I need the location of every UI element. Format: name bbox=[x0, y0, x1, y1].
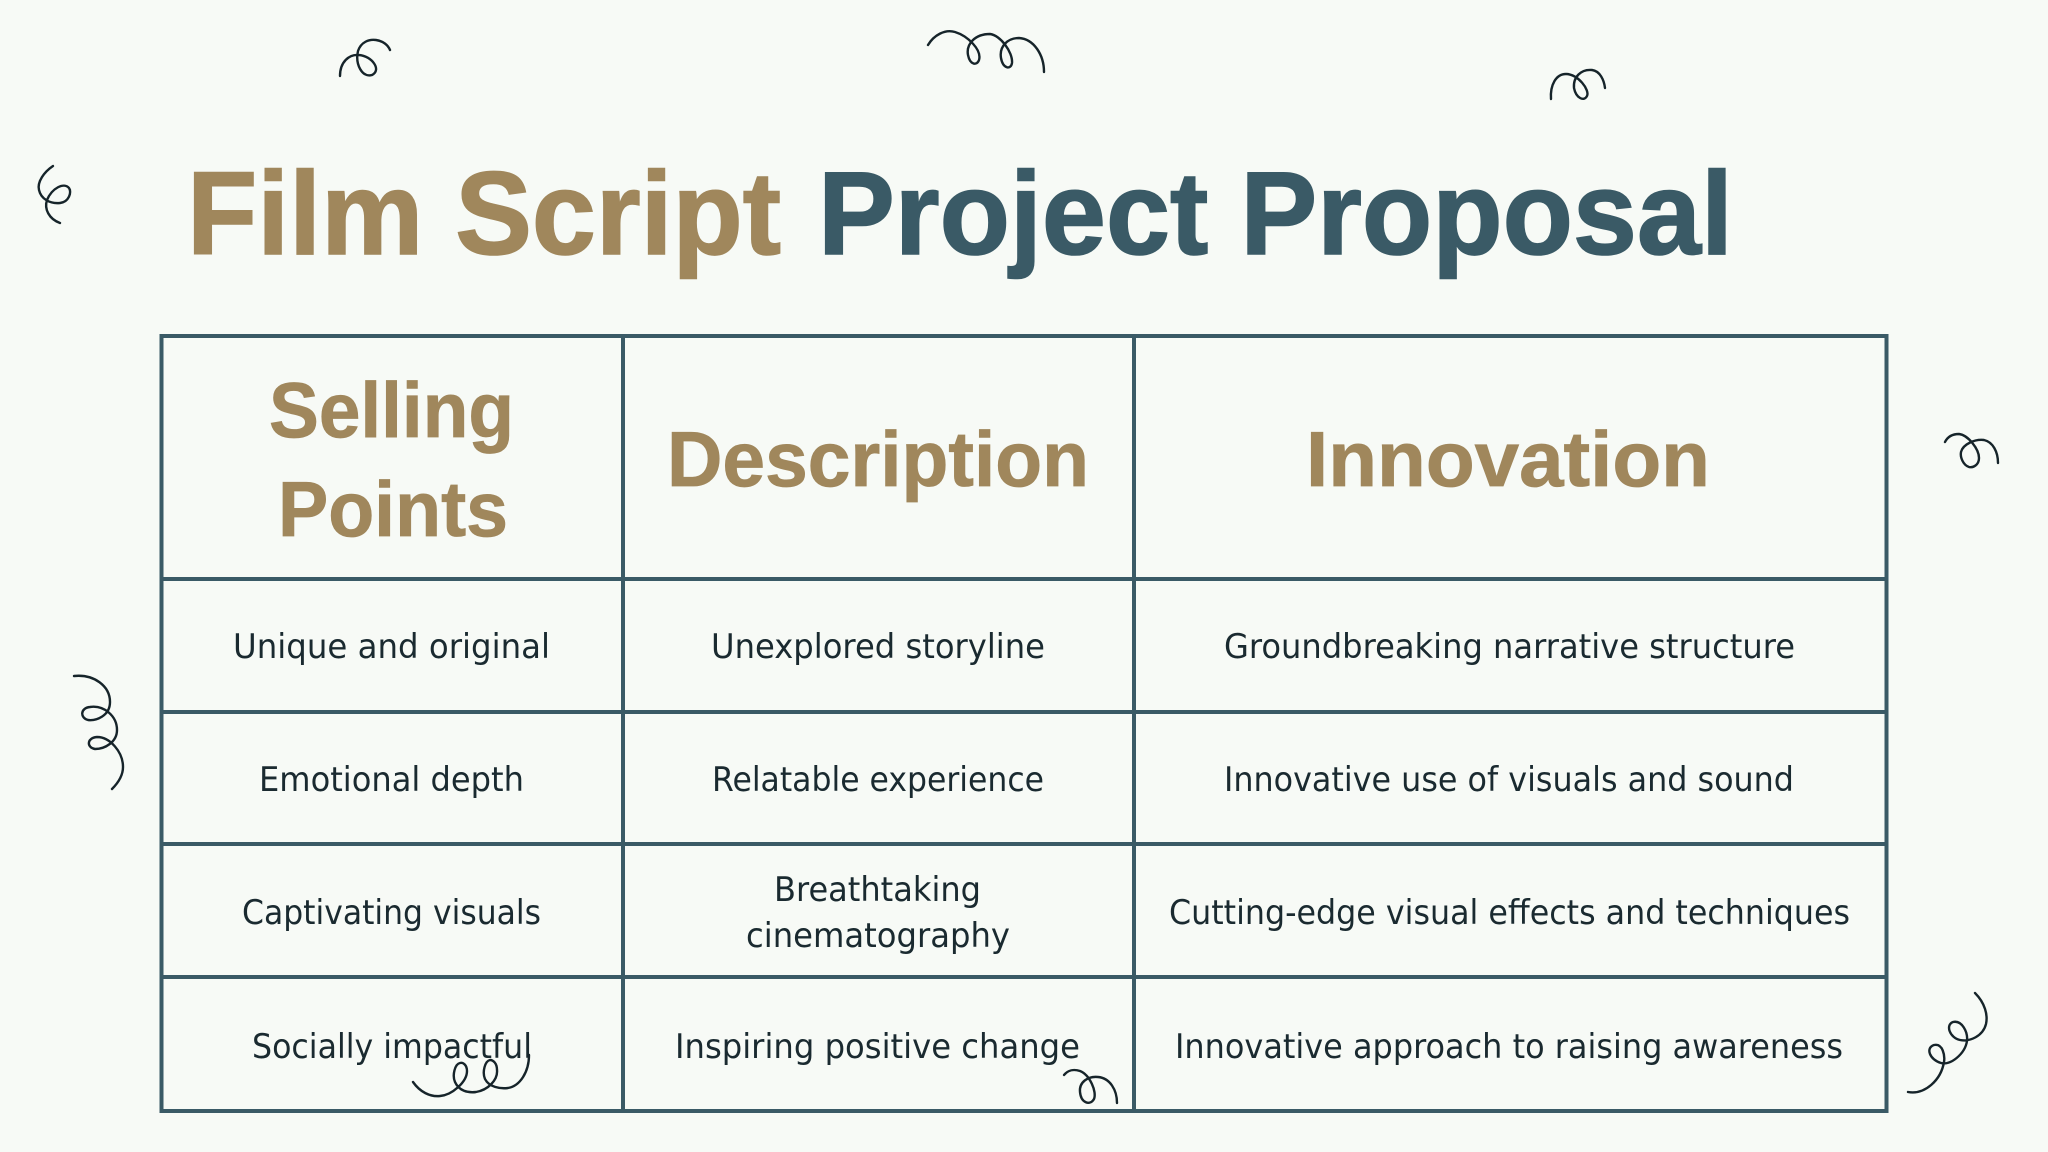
squiggle: top left bbox=[340, 40, 390, 76]
row 3: Breathtaking bbox=[774, 870, 981, 910]
row 1 bbox=[233, 627, 1795, 667]
row 3: cinematography bbox=[746, 916, 1010, 956]
title bbox=[187, 148, 1733, 280]
row 4 bbox=[252, 1027, 1843, 1067]
squiggle: inside table, first column bbox=[413, 1055, 529, 1096]
row 2: Innovative use of visuals and sound bbox=[1224, 760, 1794, 800]
column heading: Innovation: Innovation bbox=[1306, 415, 1710, 503]
row 1: Groundbreaking narrative structure bbox=[1224, 627, 1795, 667]
squiggle: lower left bbox=[74, 676, 123, 789]
row 4: Socially impactful bbox=[252, 1027, 532, 1067]
column heading: Description: Description bbox=[667, 415, 1089, 503]
squiggle: bottom right bbox=[1908, 993, 1987, 1092]
row 3: Captivating visuals bbox=[242, 893, 541, 933]
squiggle: upper left bbox=[39, 166, 70, 223]
row 2: Emotional depth bbox=[259, 760, 524, 800]
table bbox=[162, 336, 1886, 1111]
table grid bbox=[162, 336, 1886, 1111]
row 1: Unexplored storyline bbox=[711, 627, 1045, 667]
squiggle: inside table, second column bbox=[1064, 1070, 1117, 1103]
row 2: Relatable experience bbox=[712, 760, 1044, 800]
squiggle: top right bbox=[1551, 70, 1605, 99]
title part: Film Script: Film Script bbox=[187, 148, 781, 280]
row 4: Innovative approach to raising awareness bbox=[1175, 1027, 1843, 1067]
column heading: Selling Points bbox=[269, 366, 514, 553]
row 1: Unique and original bbox=[233, 627, 550, 667]
row 2 bbox=[259, 760, 1794, 800]
title part: Project Proposal: Project Proposal bbox=[818, 148, 1733, 280]
squiggle: right bbox=[1945, 434, 1998, 467]
row 4: Inspiring positive change bbox=[675, 1027, 1080, 1067]
row 3: Cutting-edge visual effects and techniques bbox=[1169, 893, 1850, 933]
column heading: Selling Points: Points bbox=[278, 465, 508, 553]
row 3 bbox=[242, 870, 1850, 956]
squiggle: top middle bbox=[928, 31, 1044, 72]
column heading: Selling Points: Selling bbox=[269, 366, 514, 454]
